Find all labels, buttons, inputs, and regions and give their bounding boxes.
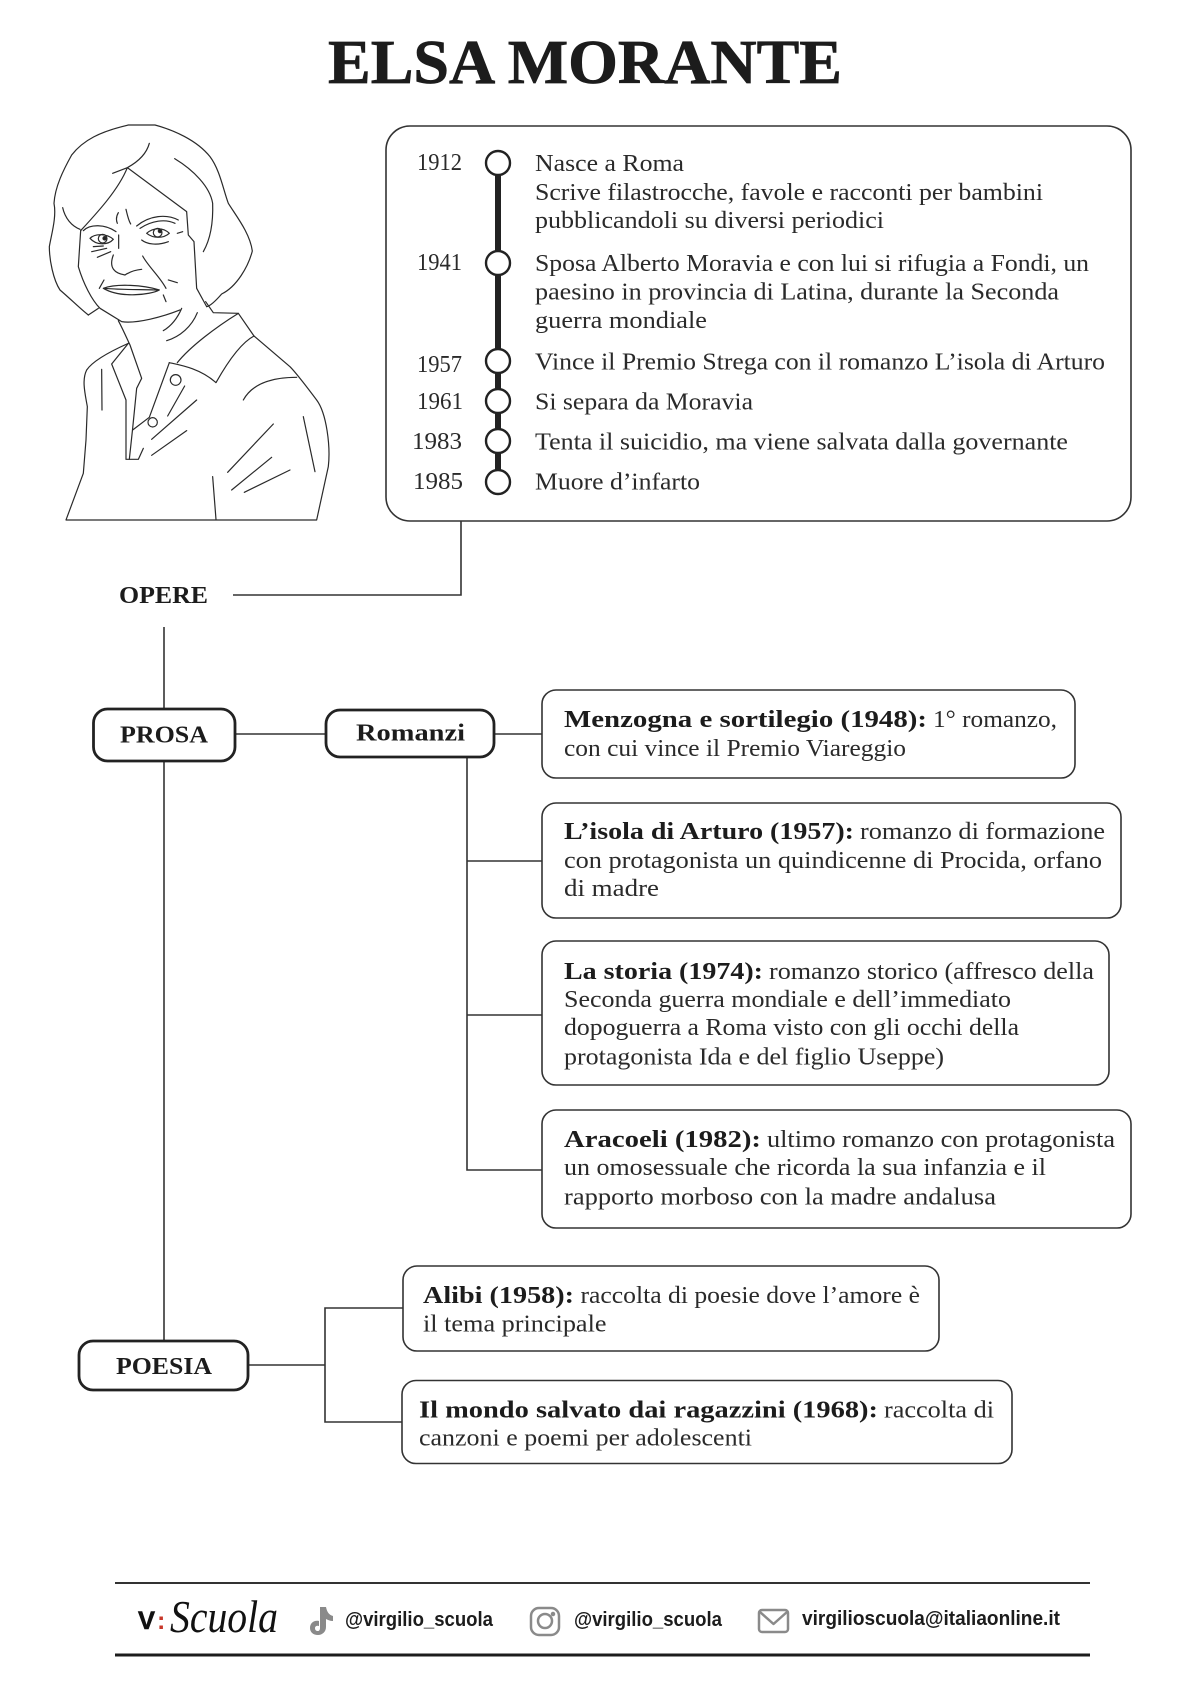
icon: portrait of Elsa Morante	[49, 125, 329, 520]
card: L'isola di Arturo: di madre	[564, 876, 659, 902]
card: L'isola di Arturo: L’isola di Arturo (1957):	[564, 819, 854, 845]
card: Il mondo salvato dai ragazzini	[402, 1380, 1012, 1464]
timeline text: pubblicandoli su diversi periodici	[535, 208, 884, 234]
card: Alibi: raccolta di poesie dove l’amore è	[580, 1283, 920, 1309]
node: PROSA	[94, 709, 235, 761]
logo: V:Scuola: Scuola	[170, 1591, 278, 1642]
title: ELSA MORANTE	[328, 29, 842, 97]
panel: timeline biography	[386, 126, 1131, 521]
card: Menzogna e sortilegio: Menzogna e sortilegio (1948):	[564, 707, 927, 733]
icon: Instagram	[531, 1608, 559, 1635]
card: Il mondo salvato dai ragazzini: Il mondo salvato dai ragazzini (1968):	[419, 1398, 878, 1424]
card: La storia: romanzo storico (affresco della	[769, 959, 1094, 985]
connectors	[164, 521, 542, 1422]
node: POESIA	[79, 1341, 248, 1390]
timeline text: Si separa da Moravia	[535, 390, 753, 416]
timeline text: Muore d’infarto	[535, 470, 700, 496]
timeline text: guerra mondiale	[535, 308, 707, 334]
node: Romanzi: Romanzi	[356, 720, 465, 746]
timeline years: 1985	[413, 469, 463, 495]
timeline text: Sposa Alberto Moravia e con lui si rifugia a Fondi, un	[535, 251, 1089, 277]
icon: mail	[759, 1610, 788, 1632]
card: Alibi	[403, 1266, 939, 1351]
timeline text: Scrive filastrocche, favole e racconti per bambini	[535, 180, 1043, 206]
node: POESIA: POESIA	[116, 1354, 213, 1380]
card: La storia: Seconda guerra mondiale e dell’immediato	[564, 987, 1011, 1013]
card: La storia: La storia (1974):	[564, 959, 763, 985]
timeline years: 1957	[417, 352, 462, 378]
card: L'isola di Arturo: con protagonista un quindicenne di Procida, orfano	[564, 848, 1102, 874]
timeline years: 1961	[417, 389, 463, 415]
card: La storia	[542, 941, 1109, 1085]
logo: V:Scuola: :	[157, 1607, 165, 1635]
footer	[115, 1583, 1090, 1655]
timeline years: 1941	[417, 250, 462, 276]
card: Menzogna e sortilegio: con cui vince il Premio Viareggio	[564, 736, 906, 762]
card: Aracoeli	[542, 1110, 1131, 1228]
timeline text: Vince il Premio Strega con il romanzo L’isola di Arturo	[535, 350, 1105, 376]
timeline years	[412, 150, 463, 495]
timeline text	[535, 151, 1105, 496]
card: Aracoeli: un omosessuale che ricorda la sua infanzia e il	[564, 1155, 1046, 1181]
icon: TikTok	[310, 1607, 333, 1635]
timeline text: Tenta il suicidio, ma viene salvata dalla governante	[535, 430, 1068, 456]
email address: virgilioscuola@italiaonline.it	[802, 1608, 1060, 1630]
card: Menzogna e sortilegio	[542, 690, 1075, 778]
card: Il mondo salvato dai ragazzini: canzoni e poemi per adolescenti	[419, 1426, 752, 1452]
handle: Instagram: @virgilio_scuola	[574, 1609, 723, 1631]
card: Aracoeli: ultimo romanzo con protagonista	[767, 1127, 1115, 1153]
heading: OPERE: OPERE	[119, 583, 208, 609]
timeline text: Nasce a Roma	[535, 151, 684, 177]
card: Aracoeli: rapporto morboso con la madre andalusa	[564, 1184, 996, 1210]
handle: TikTok: @virgilio_scuola	[345, 1609, 494, 1631]
card: Menzogna e sortilegio: 1° romanzo,	[933, 707, 1057, 733]
logo: V:Scuola	[138, 1591, 278, 1642]
card: L'isola di Arturo: romanzo di formazione	[860, 819, 1105, 845]
card: Alibi: il tema principale	[423, 1312, 606, 1338]
card: Aracoeli: Aracoeli (1982):	[564, 1127, 761, 1153]
timeline axis	[486, 151, 510, 494]
card: Alibi: Alibi (1958):	[423, 1283, 574, 1309]
card: Il mondo salvato dai ragazzini: raccolta di	[884, 1398, 994, 1424]
logo: V:Scuola: V	[138, 1607, 155, 1635]
timeline years: 1983	[412, 429, 462, 455]
card: La storia: dopoguerra a Roma visto con gli occhi della	[564, 1015, 1019, 1041]
card: La storia: protagonista Ida e del figlio Useppe)	[564, 1044, 944, 1070]
timeline years: 1912	[417, 150, 462, 176]
card: L'isola di Arturo	[542, 803, 1121, 918]
node: Romanzi	[326, 710, 494, 757]
timeline text: paesino in provincia di Latina, durante la Seconda	[535, 280, 1059, 306]
node: PROSA: PROSA	[120, 722, 209, 748]
